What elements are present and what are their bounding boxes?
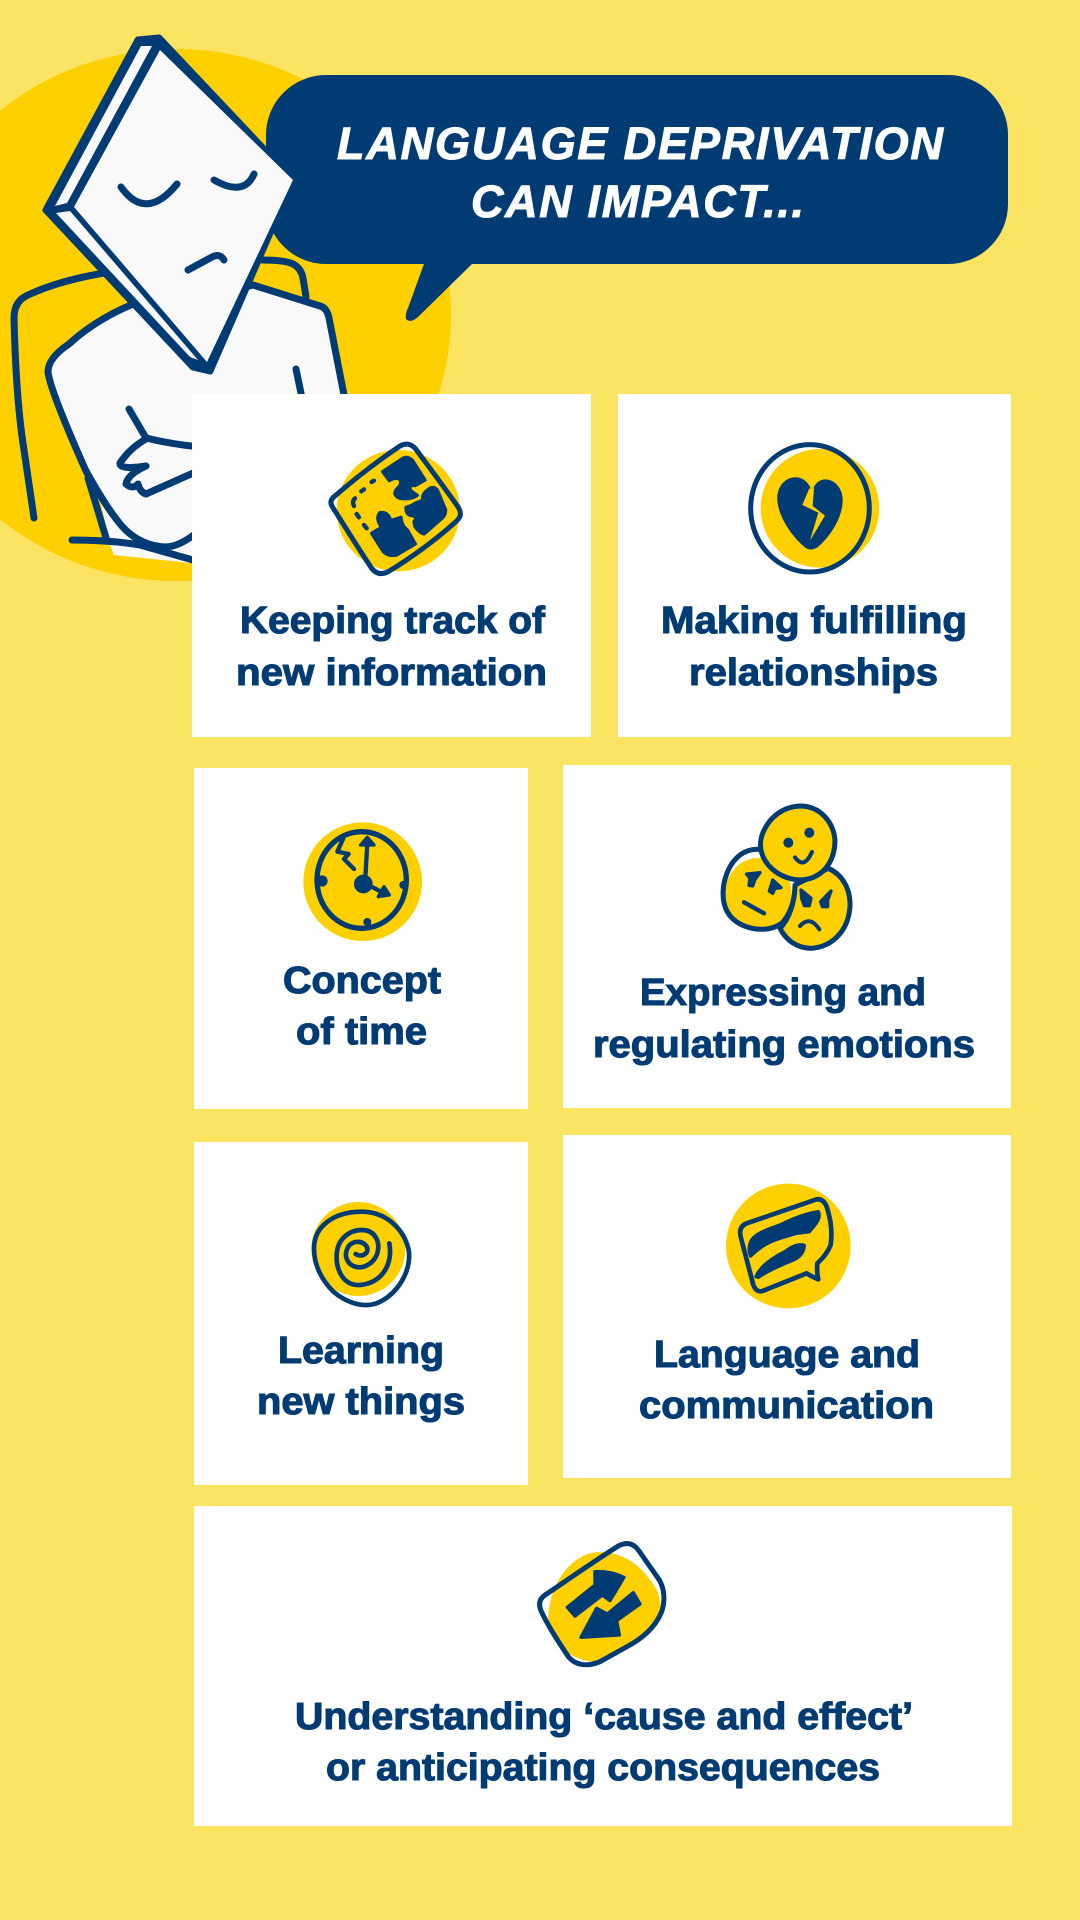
icon: opposing arrows <box>540 1544 664 1665</box>
icon: broken heart <box>751 445 879 572</box>
chair <box>14 260 306 518</box>
panel: language and communication <box>563 1135 1011 1478</box>
icon: speech scribble <box>726 1184 851 1308</box>
title <box>337 118 944 227</box>
label: or anticipating consequences <box>326 1747 880 1789</box>
panel: cause and effect <box>194 1506 1012 1826</box>
label <box>295 1696 913 1789</box>
label: Expressing and <box>640 972 926 1014</box>
title: CAN IMPACT... <box>471 176 804 227</box>
yellow background circle <box>0 49 451 581</box>
panel: learning new things <box>194 1142 528 1485</box>
label: Learning <box>278 1330 444 1372</box>
label <box>236 600 547 694</box>
label <box>639 1334 934 1427</box>
label: Concept <box>283 960 441 1002</box>
title: LANGUAGE DEPRIVATION <box>337 118 944 169</box>
label: new information <box>236 652 547 694</box>
label: communication <box>639 1385 934 1427</box>
paper on lap <box>96 480 210 565</box>
panel: relationships <box>618 394 1011 737</box>
body detail lines <box>72 369 302 562</box>
body <box>48 285 345 547</box>
label: regulating emotions <box>593 1024 975 1066</box>
icon: three faces <box>723 806 850 948</box>
icon: clock <box>303 822 422 941</box>
icon: puzzle <box>331 444 460 574</box>
speech bubble <box>266 75 1008 321</box>
panel: keeping track <box>192 394 591 737</box>
book face <box>121 174 254 270</box>
label: Keeping track of <box>240 600 545 642</box>
label <box>661 600 967 694</box>
label <box>283 960 441 1053</box>
label <box>593 972 975 1066</box>
panel: emotions <box>563 765 1011 1108</box>
label <box>257 1330 465 1423</box>
panel: concept of time <box>194 768 528 1109</box>
label: Understanding ‘cause and effect’ <box>295 1696 913 1738</box>
label: of time <box>296 1011 427 1053</box>
label: Making fulfilling <box>661 600 967 642</box>
book head <box>46 38 293 371</box>
icon: spiral <box>311 1202 409 1305</box>
label: relationships <box>689 652 938 694</box>
character: book-headed person <box>14 38 345 565</box>
label: Language and <box>654 1334 920 1376</box>
label: new things <box>257 1381 465 1423</box>
